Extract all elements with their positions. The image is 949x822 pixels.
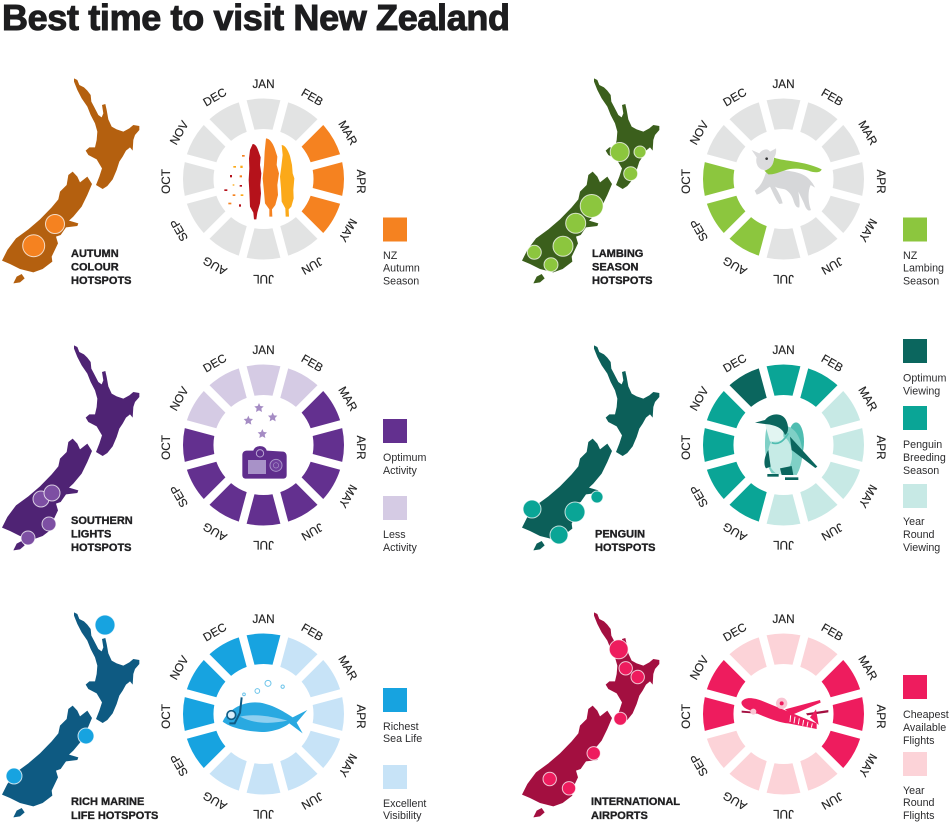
panel: lambing season <box>522 78 944 288</box>
map: southern lights hotspots <box>2 345 139 550</box>
legend: cheapest available flights: Cheapest <box>903 709 949 721</box>
map: international airports <box>522 612 659 817</box>
legend: optimum activity <box>383 419 426 477</box>
month labels: MAR <box>855 118 880 148</box>
month labels: JUL <box>253 272 274 285</box>
map label <box>71 515 133 554</box>
month labels <box>680 78 887 285</box>
map label: COLOUR <box>71 262 119 274</box>
month labels: AUG <box>201 254 229 277</box>
icon: penguin with backpack <box>755 414 817 480</box>
map: lambing season hotspots <box>522 78 659 283</box>
legend: penguin breeding season: Breeding <box>903 452 946 464</box>
month labels: SEP <box>168 482 191 509</box>
month labels: NOV <box>688 119 712 147</box>
month labels: JAN <box>252 613 275 626</box>
legend: optimum activity: Activity <box>383 465 418 477</box>
legend: penguin breeding season <box>903 406 946 477</box>
legend: NZ autumn season: NZ <box>383 250 398 262</box>
month labels: SEP <box>168 751 191 778</box>
month ring <box>703 99 864 259</box>
month ring <box>703 634 864 794</box>
legend: cheapest available flights: Available <box>903 722 946 734</box>
map label <box>71 796 158 822</box>
month labels: AUG <box>721 520 749 543</box>
legend: year round viewing: Year <box>903 516 925 528</box>
month labels: MAR <box>335 118 360 148</box>
legend: NZ lambing season: Season <box>903 276 939 288</box>
legend: less activity: Activity <box>383 542 418 554</box>
map label: AIRPORTS <box>591 810 648 822</box>
month labels <box>160 344 367 551</box>
month labels: AUG <box>721 789 749 812</box>
month labels: FEB <box>299 352 325 375</box>
month labels: APR <box>874 169 887 194</box>
month labels: FEB <box>819 621 845 644</box>
legend: richest sea life: Richest <box>383 721 419 733</box>
icon: fish with snorkel <box>223 680 307 733</box>
month labels: SEP <box>688 751 711 778</box>
month labels: FEB <box>299 621 325 644</box>
map label: SOUTHERN <box>71 515 133 527</box>
legend: year round viewing: Round <box>903 529 935 541</box>
month labels: APR <box>874 435 887 460</box>
month labels: OCT <box>160 169 173 194</box>
month labels: OCT <box>680 704 693 729</box>
month labels: MAR <box>855 384 880 414</box>
month labels: AUG <box>721 254 749 277</box>
legend: year round flights: Flights <box>903 810 934 822</box>
month labels: JAN <box>252 78 275 91</box>
legend: NZ autumn season <box>383 218 420 288</box>
legend: penguin breeding season: Season <box>903 465 939 477</box>
month labels: JUN <box>299 254 325 277</box>
map label: HOTSPOTS <box>595 542 656 554</box>
map: rich marine life hotspots <box>2 612 139 817</box>
month labels <box>680 613 887 820</box>
month labels: MAY <box>336 751 359 779</box>
month ring <box>183 99 344 259</box>
legend: year round flights: Year <box>903 785 925 797</box>
month labels <box>680 344 887 551</box>
month labels: FEB <box>299 86 325 109</box>
month ring <box>703 365 864 525</box>
legend: year round flights: Round <box>903 797 935 809</box>
month labels: JUN <box>299 789 325 812</box>
legend: NZ autumn season: Season <box>383 276 419 288</box>
month labels: MAY <box>856 751 879 779</box>
map label: HOTSPOTS <box>71 542 132 554</box>
month labels: SEP <box>168 216 191 243</box>
month labels: DEC <box>721 621 749 644</box>
month labels: JAN <box>772 344 795 357</box>
month labels: JUN <box>299 520 325 543</box>
month labels: OCT <box>160 704 173 729</box>
month labels: JAN <box>252 344 275 357</box>
panel: international airports <box>522 612 949 822</box>
month labels: MAY <box>336 216 359 244</box>
month labels: NOV <box>168 119 192 147</box>
legend: optimum viewing: Optimum <box>903 372 946 384</box>
month labels: MAR <box>335 653 360 683</box>
month labels: JUN <box>819 789 845 812</box>
legend: optimum activity: Optimum <box>383 452 426 464</box>
month labels: JAN <box>772 613 795 626</box>
month labels <box>160 78 367 285</box>
month labels: JUL <box>773 272 794 285</box>
legend: year round flights <box>903 752 935 822</box>
map label: LIFE HOTSPOTS <box>71 810 158 822</box>
legend: NZ lambing season: Lambing <box>903 262 944 274</box>
month labels: OCT <box>680 435 693 460</box>
month labels: FEB <box>819 86 845 109</box>
map label: LAMBING <box>592 248 643 260</box>
legend: less activity: Less <box>383 529 406 541</box>
legend: richest sea life: Sea Life <box>383 733 422 745</box>
month labels: JUL <box>773 538 794 551</box>
map label <box>592 248 653 287</box>
month labels: MAY <box>336 482 359 510</box>
legend: excellent visibility: Excellent <box>383 798 426 810</box>
map label: LIGHTS <box>71 528 111 540</box>
map label: HOTSPOTS <box>592 275 653 287</box>
map label: PENGUIN <box>595 528 645 540</box>
panel: autumn colour <box>2 78 420 288</box>
legend: optimum viewing: Viewing <box>903 386 940 398</box>
month labels: JUN <box>819 520 845 543</box>
legend: excellent visibility: Visibility <box>383 810 422 822</box>
month labels: APR <box>354 435 367 460</box>
month labels: JAN <box>772 78 795 91</box>
map label: INTERNATIONAL <box>591 796 680 808</box>
month labels: AUG <box>201 789 229 812</box>
month ring <box>183 365 344 525</box>
month labels: SEP <box>688 482 711 509</box>
month ring <box>183 634 344 794</box>
map label <box>591 796 680 822</box>
legend: NZ lambing season <box>903 218 944 288</box>
month labels: DEC <box>201 621 229 644</box>
month labels: FEB <box>819 352 845 375</box>
month labels: MAR <box>335 384 360 414</box>
month labels: JUN <box>819 254 845 277</box>
icon: aeroplane <box>741 698 828 729</box>
month labels: NOV <box>168 654 192 682</box>
map label: HOTSPOTS <box>71 275 132 287</box>
month labels: DEC <box>721 86 749 109</box>
icon: camera and stars <box>242 403 287 479</box>
legend: cheapest available flights: Flights <box>903 735 934 747</box>
month labels: DEC <box>201 86 229 109</box>
month labels: AUG <box>201 520 229 543</box>
legend: cheapest available flights <box>903 675 949 747</box>
month labels: DEC <box>201 352 229 375</box>
map: autumn colour hotspots <box>2 78 139 283</box>
map label: SEASON <box>592 262 639 274</box>
month labels <box>160 613 367 820</box>
month labels: APR <box>874 704 887 729</box>
icon: autumn poplar trees <box>224 138 294 219</box>
legend: NZ autumn season: Autumn <box>383 262 420 274</box>
month labels: NOV <box>168 385 192 413</box>
legend: year round viewing <box>903 484 940 554</box>
month labels: MAR <box>855 653 880 683</box>
month labels: MAY <box>856 216 879 244</box>
month labels: JUL <box>253 807 274 820</box>
map label: RICH MARINE <box>71 796 144 808</box>
legend: penguin breeding season: Penguin <box>903 439 942 451</box>
panel: southern lights <box>2 344 426 554</box>
month labels: NOV <box>688 385 712 413</box>
month labels: JUL <box>773 807 794 820</box>
legend: year round viewing: Viewing <box>903 542 940 554</box>
month labels: DEC <box>721 352 749 375</box>
month labels: NOV <box>688 654 712 682</box>
icon: flying lamb with green scarf <box>752 148 822 211</box>
month labels: JUL <box>253 538 274 551</box>
map label <box>595 528 656 554</box>
legend: excellent visibility <box>383 765 426 822</box>
legend: richest sea life <box>383 688 422 745</box>
panel: penguins <box>522 339 946 554</box>
legend: less activity <box>383 496 418 554</box>
legend: optimum viewing <box>903 339 946 398</box>
month labels: APR <box>354 169 367 194</box>
panel: marine life <box>2 612 426 822</box>
month labels: OCT <box>680 169 693 194</box>
map: penguin hotspots <box>522 345 659 550</box>
map label: AUTUMN <box>71 248 119 260</box>
map label <box>71 248 132 287</box>
month labels: OCT <box>160 435 173 460</box>
legend: NZ lambing season: NZ <box>903 250 918 262</box>
month labels: APR <box>354 704 367 729</box>
month labels: MAY <box>856 482 879 510</box>
month labels: SEP <box>688 216 711 243</box>
